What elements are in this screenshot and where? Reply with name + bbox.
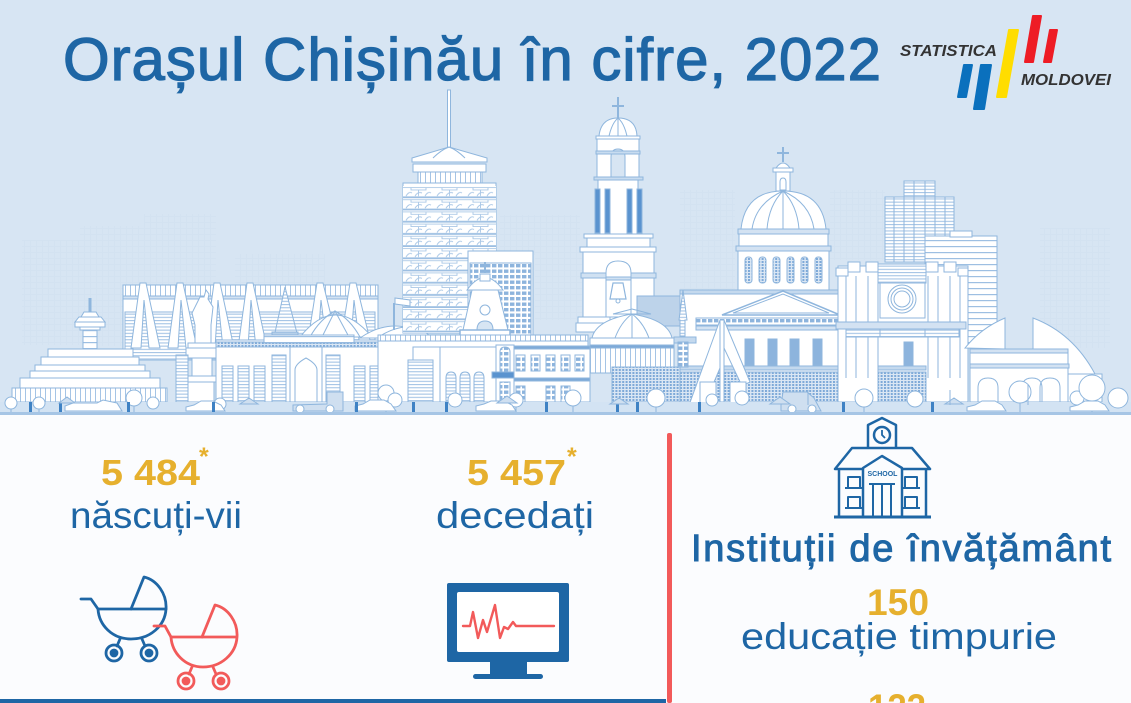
- building: stepped terraces with mushroom tower: [12, 298, 167, 402]
- icon: school building: [834, 418, 931, 517]
- shell-roof building: [965, 318, 1102, 402]
- monument with statue: [176, 290, 216, 402]
- skyscrapers behind palace: [885, 181, 997, 346]
- monument: obelisk: [688, 320, 750, 408]
- logo: Statistica Moldovei: [900, 16, 1112, 109]
- street lamps and canopies: [59, 385, 1028, 405]
- divider: vertical red bar: [667, 433, 672, 703]
- icon: school building: SCHOOL: [868, 471, 898, 478]
- stat: deaths: 5 457: [467, 452, 566, 493]
- illustration: Chișinău skyline: [0, 90, 1131, 415]
- street band: [0, 402, 1131, 415]
- stat: births: 5 484: [101, 452, 200, 493]
- heading: education institutions: Instituții de învățământ: [691, 528, 1111, 570]
- logo: Statistica Moldovei: STATISTICA: [900, 43, 997, 60]
- clock tower: [394, 262, 510, 340]
- stat: deaths: decedați: [436, 495, 594, 536]
- logo: Statistica Moldovei: MOLDOVEI: [1021, 72, 1112, 89]
- cathedral with dome: [674, 147, 840, 402]
- building: arched row with domes: [216, 287, 446, 402]
- stat: deaths: *: [567, 443, 577, 471]
- lower row: buildings and small dome: [378, 309, 682, 402]
- divider: horizontal blue bar: [0, 699, 666, 703]
- street cars: [65, 392, 1109, 413]
- header background: [0, 0, 1131, 415]
- stat: deaths: [436, 443, 594, 536]
- stat: births: născuți-vii: [70, 495, 242, 536]
- street pedestrians: [29, 402, 934, 413]
- icon: baby strollers: [81, 577, 237, 689]
- belfry: [576, 97, 681, 332]
- stat: early education: educație timpurie: [741, 616, 1057, 657]
- lower panel background: [0, 415, 1131, 703]
- title: Orașul Chișinău în cifre, 2022: [63, 26, 881, 93]
- mid-rise building behind clock tower: [468, 251, 533, 337]
- street trees: [5, 375, 1128, 414]
- faint background buildings: [22, 190, 1110, 348]
- stat: early education: 150: [867, 582, 929, 623]
- stat: early education: [741, 582, 1057, 657]
- tower block with spire: [403, 90, 496, 333]
- icon: heart monitor: [447, 583, 569, 679]
- stat: births: *: [199, 443, 209, 471]
- stat: births: [70, 443, 242, 536]
- building: hall with A-frames: [123, 283, 378, 360]
- palace with rosette: [836, 262, 968, 402]
